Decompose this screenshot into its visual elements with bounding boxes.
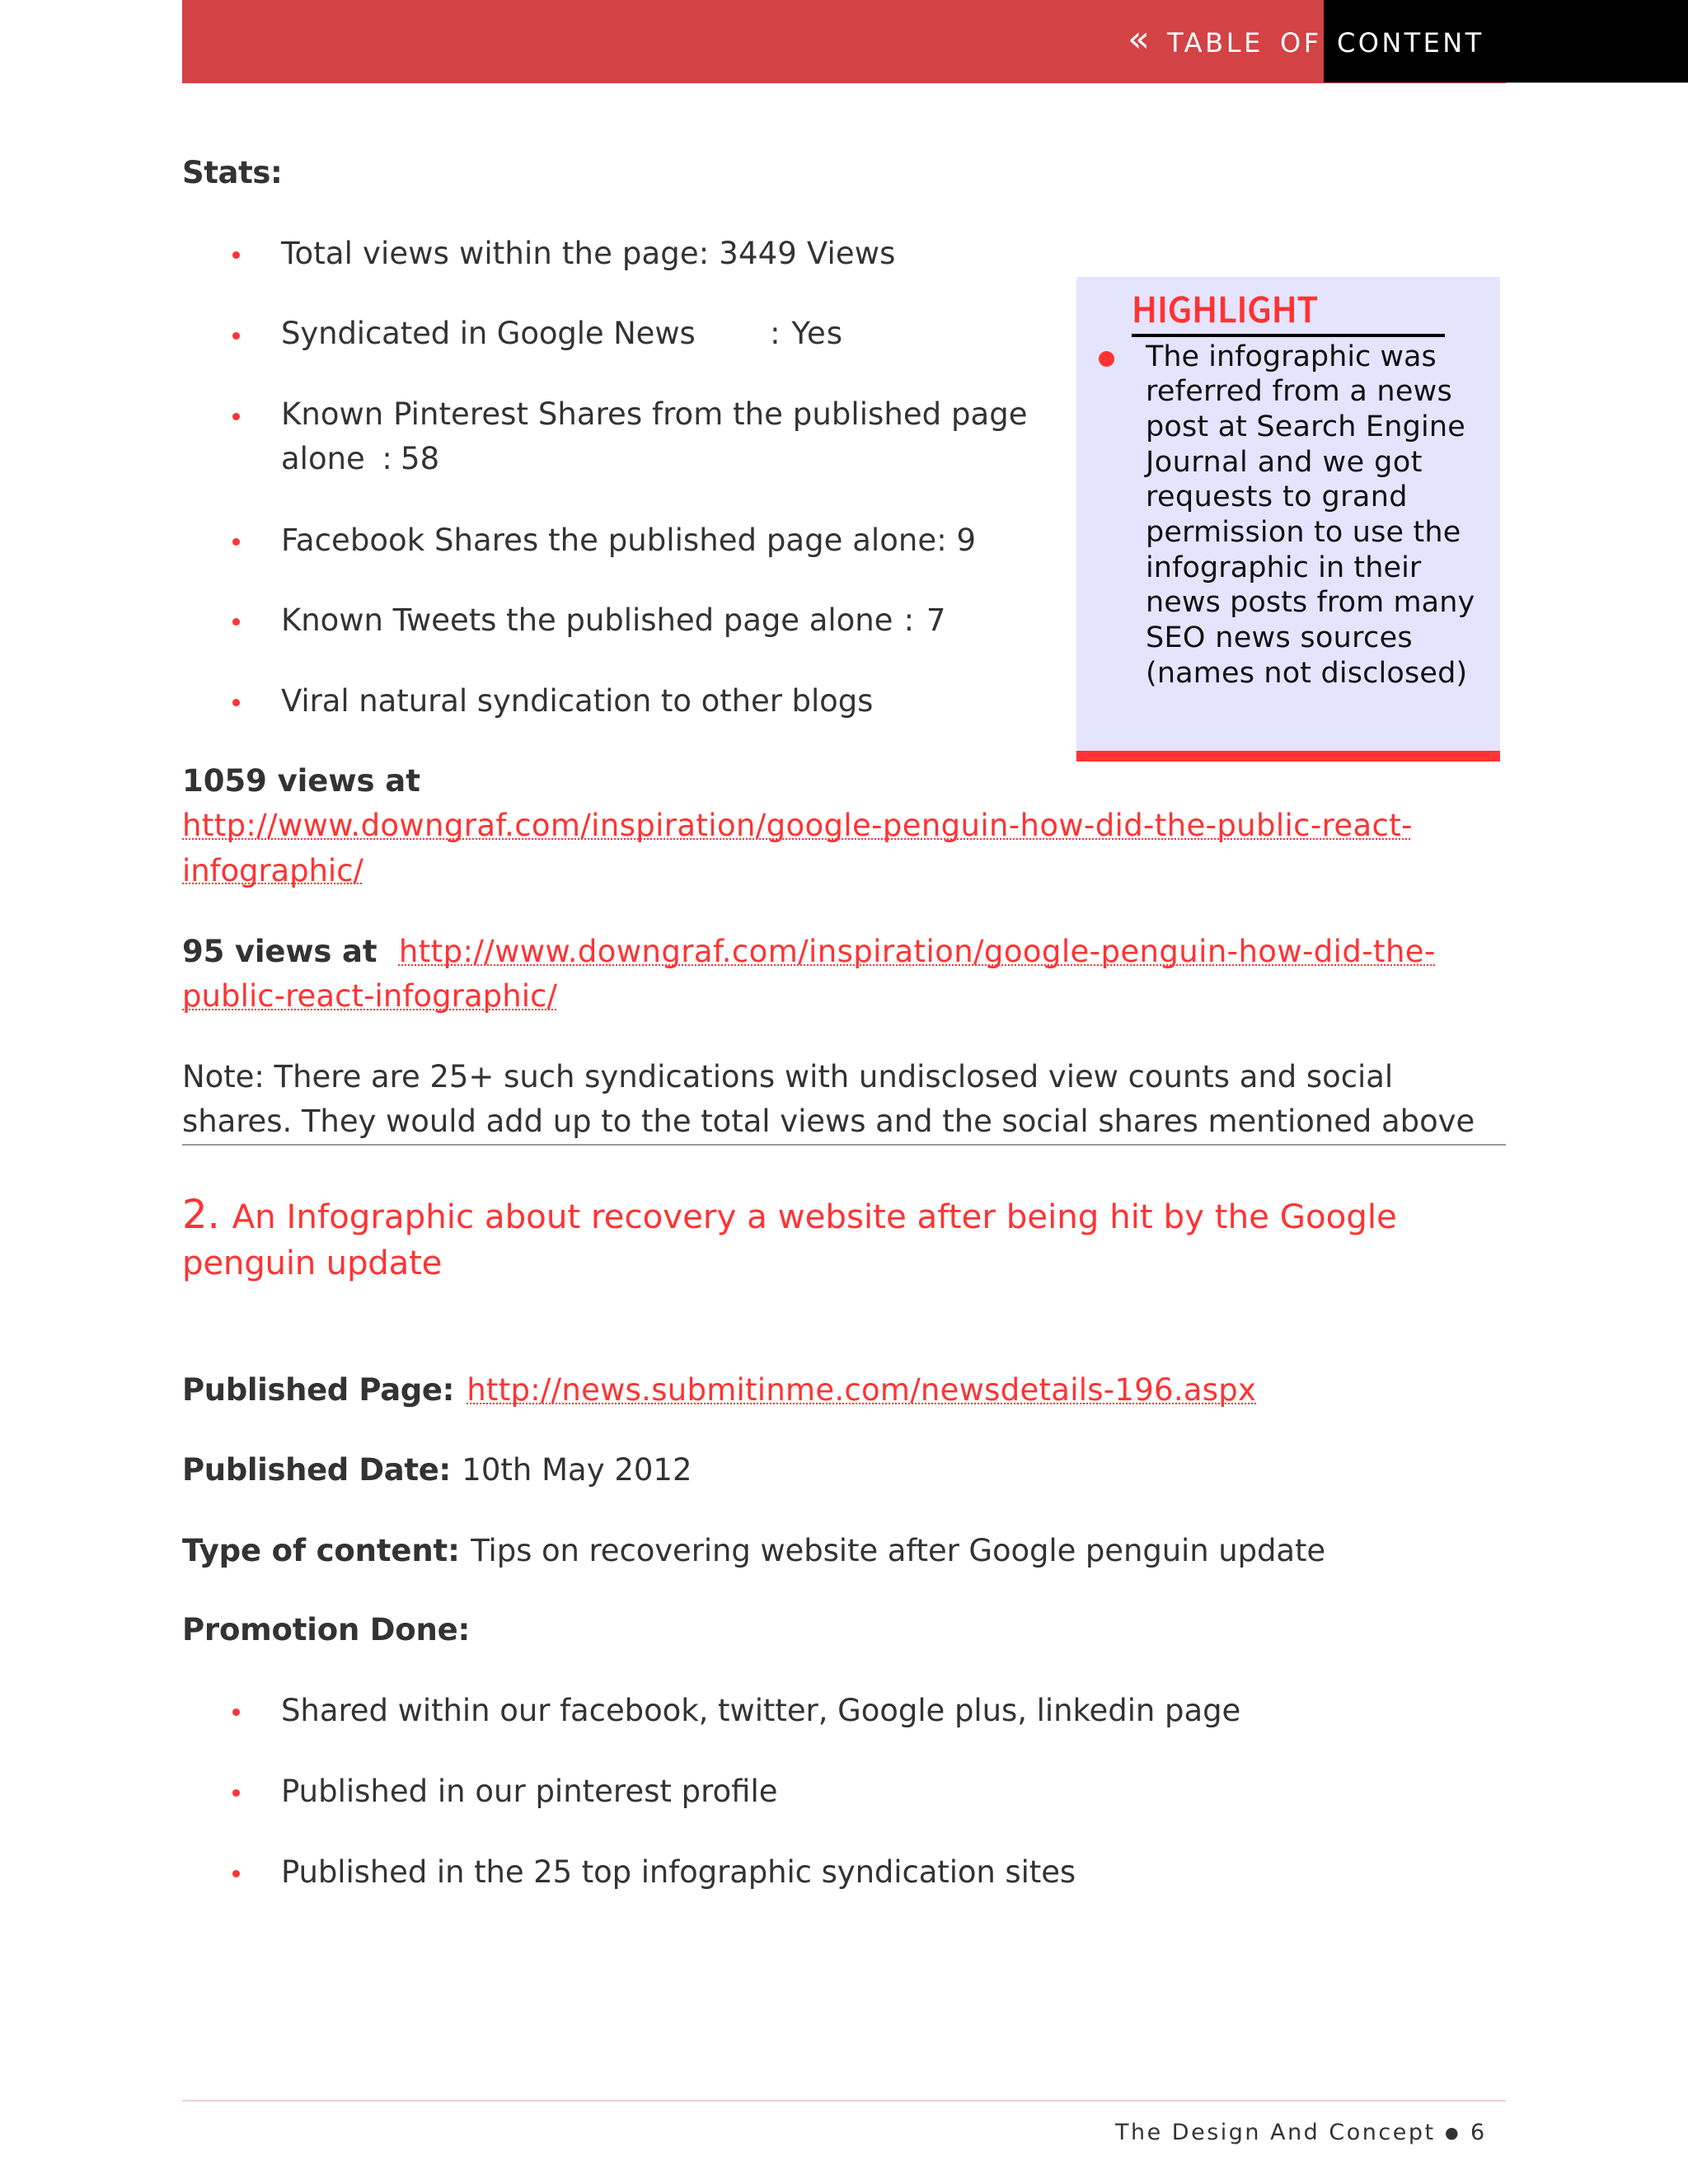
views block 1: infographic/	[182, 853, 363, 888]
section heading: 2. An Infographic about recovery a website after being hit by the Google	[182, 1192, 1397, 1238]
stat: google news: Syndicated in Google News : Yes	[281, 316, 843, 351]
stat: total views: Total views within the page: 3449 Views	[281, 236, 896, 271]
footer text	[1114, 2120, 1484, 2145]
grey hairline under black block	[1506, 82, 1688, 83]
promotion heading: Promotion Done:	[182, 1612, 470, 1647]
highlight text: post at Search Engine	[1146, 410, 1465, 443]
red header band	[182, 0, 1324, 83]
note: Note: There are 25+ such syndications with undisclosed view counts and social	[182, 1059, 1393, 1094]
bullet 6	[232, 699, 240, 706]
word: content: CONTENT	[1337, 27, 1484, 59]
stats bullet list	[232, 236, 1028, 719]
bullet 3	[232, 413, 240, 420]
table of content link	[1128, 18, 1484, 60]
promotion: pinterest: Published in our pinterest profile	[281, 1774, 778, 1809]
published page: Published Page: http://news.submitinme.com/newsdetails-196.aspx	[182, 1372, 1256, 1408]
bullet 3	[232, 1870, 240, 1877]
icon: double chevron: «	[1128, 18, 1150, 60]
highlight panel	[1076, 277, 1500, 762]
stat: viral syndication: Viral natural syndication to other blogs	[281, 683, 873, 719]
footer rule	[182, 2100, 1506, 2102]
promotion bullet list	[232, 1693, 1240, 1890]
bullet dot	[1099, 351, 1114, 367]
highlight text: Journal and we got	[1146, 446, 1423, 479]
bullet 1	[232, 251, 240, 259]
stats heading: Stats:	[182, 155, 282, 190]
highlight text: requests to grand	[1146, 480, 1408, 513]
note	[182, 1059, 1475, 1139]
highlight text: infographic in their	[1146, 551, 1421, 584]
red hairline under black block	[1324, 82, 1506, 83]
type of content: Type of content: Tips on recovering website after Google penguin update	[182, 1533, 1325, 1568]
views block 2: public-react-infographic/	[182, 978, 557, 1014]
views block 1	[182, 763, 1413, 888]
stat: pinterest shares	[281, 396, 1028, 476]
footer title: The Design And Concept	[1115, 2120, 1436, 2145]
highlight text	[1144, 340, 1475, 690]
views block 1: 1059 views at	[182, 763, 420, 799]
heading rule	[1132, 334, 1445, 337]
views block 2	[182, 934, 1436, 1014]
header bar	[182, 0, 1688, 83]
bullet 1	[232, 1708, 240, 1716]
footer separator dot: ●	[1445, 2124, 1459, 2142]
bullet 5	[232, 618, 240, 626]
highlight text: referred from a news	[1146, 375, 1452, 408]
promotion: syndication: Published in the 25 top infographic syndication sites	[281, 1854, 1076, 1890]
word: of: OF	[1280, 27, 1322, 59]
highlight text: permission to use the	[1146, 516, 1461, 549]
note: shares. They would add up to the total views and the social shares mentioned above	[182, 1104, 1475, 1139]
divider	[182, 1144, 1506, 1146]
promotion: social: Shared within our facebook, twitter, Google plus, linkedin page	[281, 1693, 1240, 1728]
highlight text: SEO news sources	[1146, 621, 1413, 654]
highlight text: The infographic was	[1146, 340, 1437, 373]
stat: pinterest shares: alone : 58	[281, 441, 439, 476]
black header block	[1324, 0, 1688, 82]
page number: 6	[1470, 2120, 1484, 2145]
section heading	[182, 1192, 1397, 1282]
stat: pinterest shares: Known Pinterest Shares from the published page	[281, 396, 1028, 432]
stat: facebook shares: Facebook Shares the published page alone: 9	[281, 523, 976, 558]
bullet 4	[232, 538, 240, 546]
views block 1: http://www.downgraf.com/inspiration/google-penguin-how-did-the-public-react-	[182, 808, 1413, 843]
stat: tweets: Known Tweets the published page alone : 7	[281, 602, 947, 638]
bullet 2	[232, 1789, 240, 1797]
highlight heading: HIGHLIGHT	[1132, 284, 1318, 333]
red bottom bar	[1076, 751, 1500, 762]
word: table: TABLE	[1167, 27, 1264, 59]
bullet 2	[232, 332, 240, 340]
highlight text: news posts from many	[1146, 586, 1475, 619]
published date: Published Date: 10th May 2012	[182, 1452, 692, 1488]
views block 2: 95 views at http://www.downgraf.com/inspiration/google-penguin-how-did-the-	[182, 934, 1436, 969]
section heading: penguin update	[182, 1244, 442, 1282]
highlight text: (names not disclosed)	[1146, 657, 1467, 690]
